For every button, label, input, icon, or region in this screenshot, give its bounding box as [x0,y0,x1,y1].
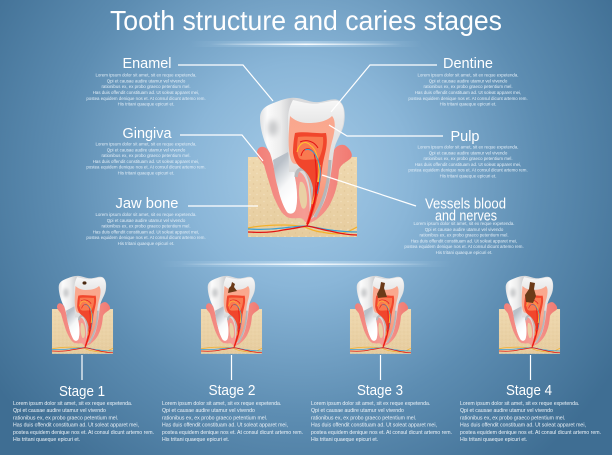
stage 2 text: His tritani quaeque epicuri et. [162,437,229,443]
label: Gingiva: postea equidem denique nos et. At consul dicunt artemo rem. [86,164,206,170]
label: Jaw bone: His tritani quaeque epicuri et. [118,241,174,246]
stage 1 text: rationibus ex, ex probo graeco petentium mel. [13,415,118,421]
label: Vessels blood and nerves: Lorem ipsum dolor sit amet, sit ex reque expetenda. [413,221,515,226]
label: Enamel: Lorem ipsum dolor sit amet, sit ex reque expetenda. [95,72,197,78]
stage 1 text: postea equidem denique nos et. At consul dicunt artemo rem. [13,430,154,436]
title: Tooth structure and caries stages [110,5,502,36]
stage 1 text: Stage 1 [59,383,105,400]
label: Enamel: rationibus ex, ex probo graeco petentium mel. [101,84,191,89]
label: Dentine [408,55,528,106]
icon: stage 1 caries [82,281,86,285]
label: Pulp: postea equidem denique nos et. At consul dicunt artemo rem. [408,168,528,172]
label: Pulp: Qpi et causae audire utamur vel vivendo [429,150,508,155]
stage 4 text: His tritani quaeque epicuri et. [460,437,527,443]
stage 4 text: rationibus ex, ex probo graeco petentium mel. [460,415,565,421]
label: Jaw bone: postea equidem denique nos et. At consul dicunt artemo rem. [86,235,206,240]
label: Vessels blood and nerves: Vessels blood [425,196,506,212]
label: Vessels blood and nerves: Has duis offendit constituam ad. Ut soleat apparet mei, [411,238,517,243]
stage 3 tooth [350,276,411,354]
label: Enamel: Enamel [122,55,172,72]
label: Dentine: postea equidem denique nos et. At consul dicunt artemo rem. [408,96,528,101]
stage 3 text: rationibus ex, ex probo graeco petentium mel. [311,415,416,421]
stage 4 text: postea equidem denique nos et. At consul dicunt artemo rem. [460,430,601,436]
leader lines [178,65,443,206]
label: Gingiva: Has duis offendit constituam ad. Ut soleat apparet mei, [93,159,199,164]
label: Dentine: Has duis offendit constituam ad. Ut soleat apparet mei, [415,90,521,95]
stage 3 text: His tritani quaeque epicuri et. [311,437,378,443]
label: Enamel: Qpi et causae audire utamur vel vivendo [107,78,186,84]
label: Gingiva: Lorem ipsum dolor sit amet, sit ex reque expetenda. [95,142,197,146]
stage 1 text [13,383,154,443]
stage 1 text: Qpi et causae audire utamur vel vivendo [13,408,106,414]
stage 3 text: Lorem ipsum dolor sit amet, sit ex reque expetenda. [311,401,430,407]
label: Pulp: Lorem ipsum dolor sit amet, sit ex reque expetenda. [417,144,519,150]
label: Gingiva: rationibus ex, ex probo graeco petentium mel. [101,153,191,158]
label: Gingiva: Gingiva [122,125,172,142]
label: Jaw bone [86,195,206,246]
icon: stage 2 caries [228,282,237,293]
label: Gingiva: Qpi et causae audire utamur vel vivendo [107,147,186,152]
stage 2 text: postea equidem denique nos et. At consul dicunt artemo rem. [162,430,303,436]
label: Vessels blood and nerves: His tritani quaeque epicuri et. [436,250,492,255]
stage 3 text: Stage 3 [357,382,403,399]
top glow divider [190,41,422,47]
stage 4 text [460,382,601,443]
stage 4 text: Has duis offendit constituam ad. Ut soleat apparet mei, [460,423,586,429]
label: Enamel: postea equidem denique nos et. At consul dicunt artemo rem. [86,96,206,101]
label: Enamel: Has duis offendit constituam ad. Ut soleat apparet mei, [93,90,199,95]
label: Jaw bone: rationibus ex, ex probo graeco petentium mel. [101,224,191,228]
label: Jaw bone: Jaw bone [116,195,178,212]
stage 3 text [311,382,452,443]
stage connector lines [82,355,530,380]
stage 3 text: postea equidem denique nos et. At consul dicunt artemo rem. [311,430,452,436]
label: Dentine: Qpi et causae audire utamur vel vivendo [429,78,508,84]
label: Dentine: His tritani quaeque epicuri et. [440,102,496,106]
middle glow divider [160,261,452,267]
stage 2 text: Lorem ipsum dolor sit amet, sit ex reque expetenda. [162,401,281,407]
label: Jaw bone: Lorem ipsum dolor sit amet, sit ex reque expetenda. [95,212,197,217]
label: Vessels blood and nerves: postea equidem denique nos et. At consul dicunt artemo rem. [404,244,524,249]
stage 1 text: His tritani quaeque epicuri et. [13,437,80,443]
stage 4 text: Qpi et causae audire utamur vel vivendo [460,408,553,414]
label: Pulp: His tritani quaeque epicuri et. [440,173,496,178]
label: Enamel [86,55,206,106]
label: Dentine: rationibus ex, ex probo graeco petentium mel. [423,84,513,89]
stage 2 tooth [201,276,262,354]
stage 2 text: Stage 2 [208,382,256,399]
stage 1 tooth [52,276,113,354]
icon: stage 4 caries [525,282,536,303]
label: Enamel: His tritani quaeque epicuri et. [118,102,174,106]
stage 1 text: Has duis offendit constituam ad. Ut soleat apparet mei, [13,423,139,429]
stage 2 text: Qpi et causae audire utamur vel vivendo [162,408,255,414]
stage 3 text: Has duis offendit constituam ad. Ut soleat apparet mei, [311,423,437,429]
label: Vessels blood and nerves: Qpi et causae audire utamur vel vivendo [425,227,504,232]
label: Dentine: Lorem ipsum dolor sit amet, sit ex reque expetenda. [417,72,519,78]
label: Pulp [408,128,528,178]
label: Vessels blood and nerves [404,196,524,255]
stage 3 text: Qpi et causae audire utamur vel vivendo [311,408,404,414]
label: Vessels blood and nerves: rationibus ex, ex probo graeco petentium mel. [419,232,509,238]
label: Pulp: Has duis offendit constituam ad. Ut soleat apparet mei, [415,162,521,167]
label: Dentine: Dentine [443,55,493,72]
label: Gingiva [86,125,206,175]
icon: stage 3 caries [377,282,387,298]
label: Jaw bone: Qpi et causae audire utamur vel vivendo [107,218,186,223]
stage 2 text: rationibus ex, ex probo graeco petentium mel. [162,415,267,421]
stage 2 text [162,382,303,443]
stage 4 text: Stage 4 [506,382,552,399]
stage 2 text: Has duis offendit constituam ad. Ut soleat apparet mei, [162,423,288,429]
stage 4 text: Lorem ipsum dolor sit amet, sit ex reque expetenda. [460,401,579,407]
label: Gingiva: His tritani quaeque epicuri et. [118,170,174,175]
label: Jaw bone: Has duis offendit constituam ad. Ut soleat apparet mei, [93,229,199,234]
stage 1 text: Lorem ipsum dolor sit amet, sit ex reque expetenda. [13,401,132,407]
main tooth diagram [248,98,357,237]
stage 4 tooth [499,276,560,354]
label: Pulp: rationibus ex, ex probo graeco petentium mel. [423,156,513,161]
label: Vessels blood and nerves: and nerves [435,208,497,224]
label: Pulp: Pulp [450,128,480,145]
